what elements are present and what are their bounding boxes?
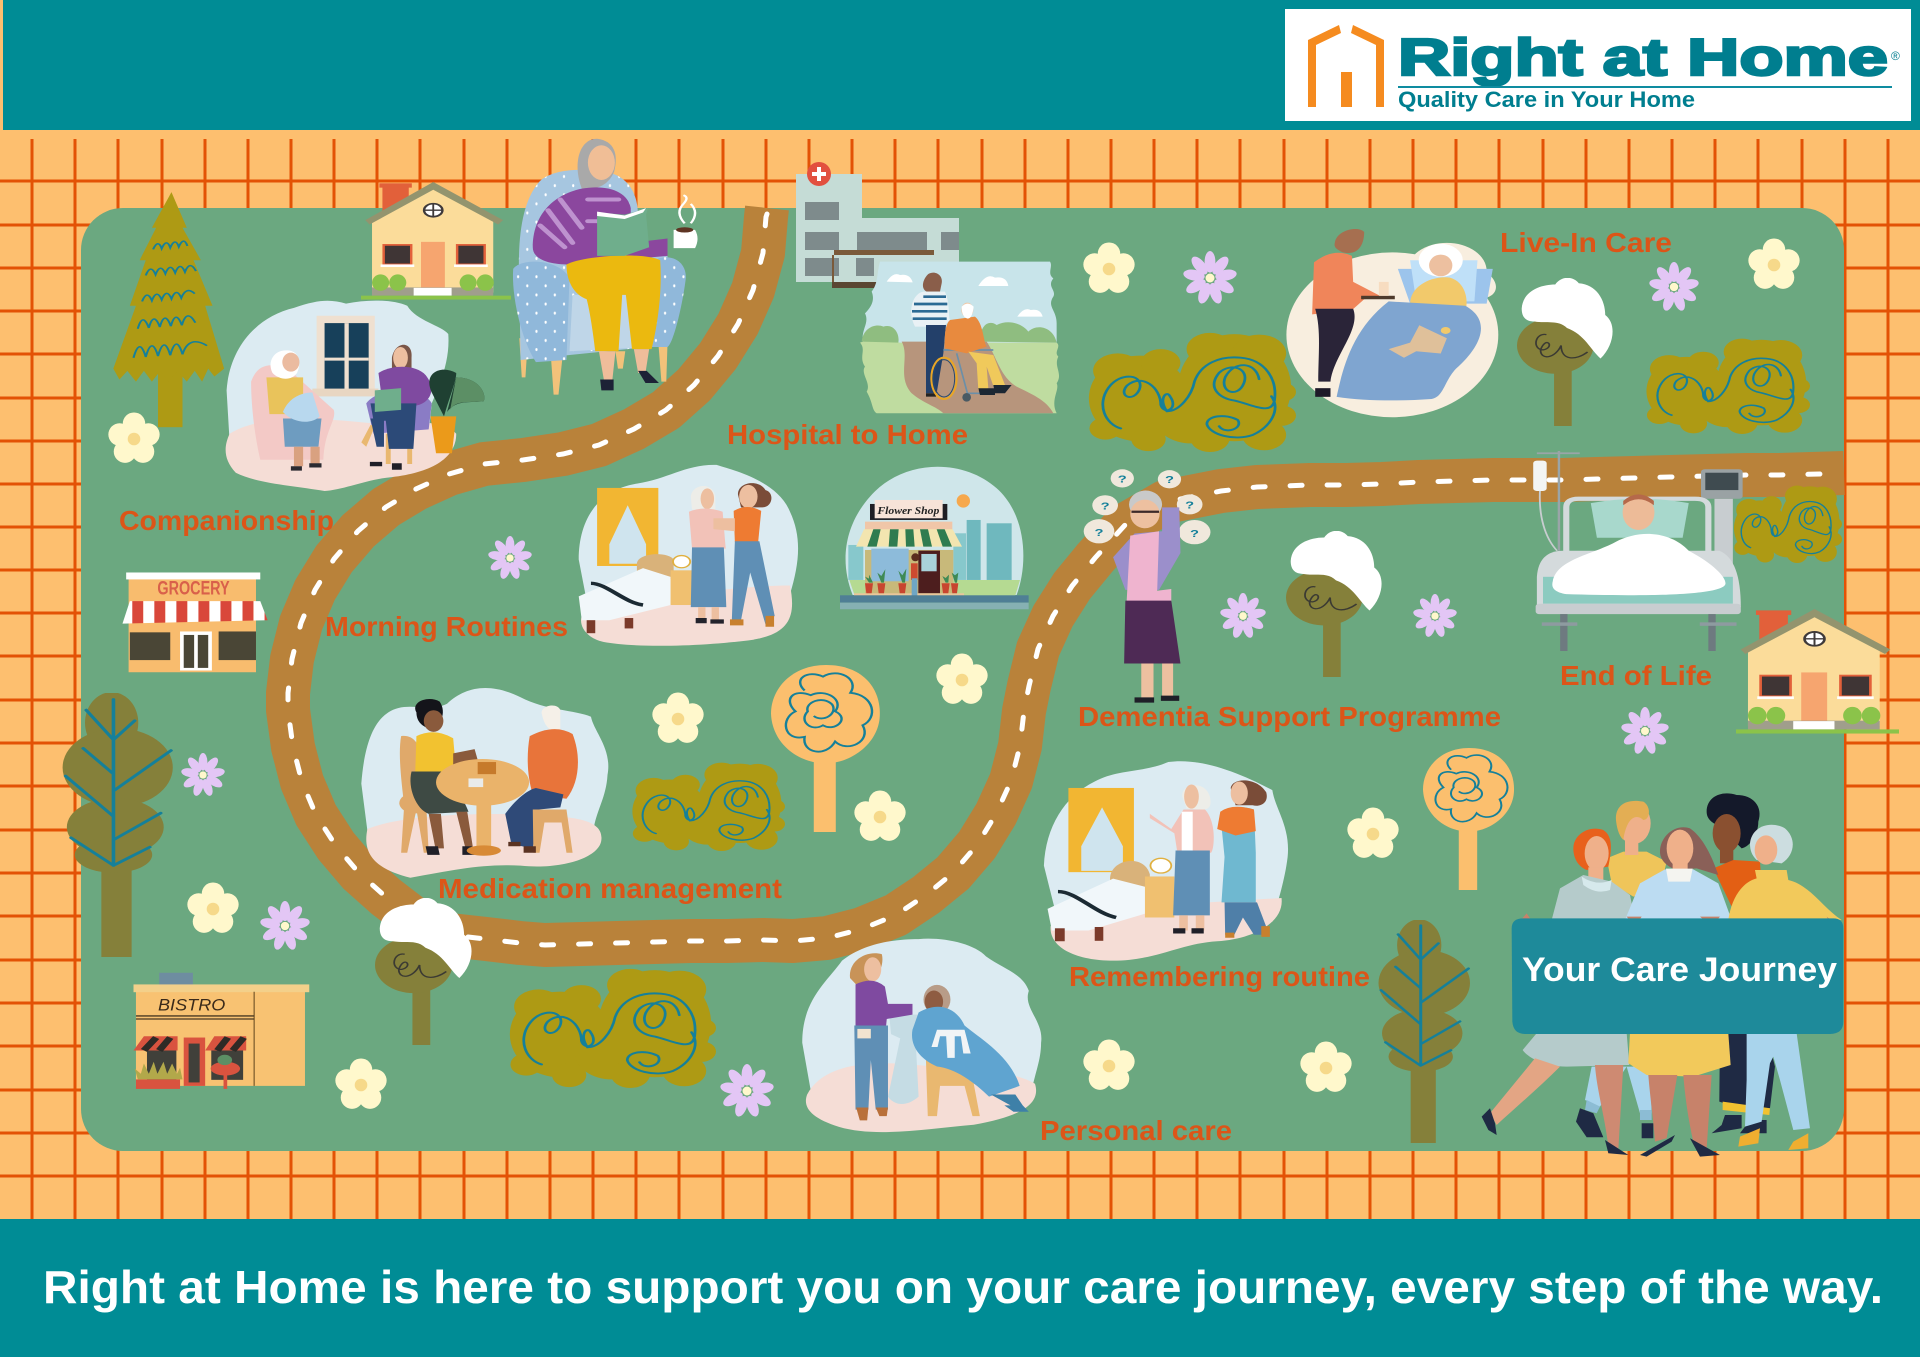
icon: cream flowers [108, 238, 1800, 1109]
seated elder [251, 365, 334, 460]
scene: end of life bed [1533, 451, 1743, 651]
logo wordmark: Right at Home [1398, 29, 1888, 87]
footer band [0, 1219, 1920, 1357]
window [317, 316, 375, 396]
scene: dementia support figure: ? [1118, 472, 1127, 485]
scene: dementia support figure: ? [1190, 527, 1199, 539]
logo rule [1398, 86, 1892, 88]
label: remembering routine: Remembering routine [1069, 961, 1370, 992]
scene: flower shop [840, 467, 1029, 609]
scene: grocery shop [122, 572, 268, 672]
logo house icon [1308, 25, 1384, 107]
label: personal care: Personal care [1040, 1115, 1232, 1146]
trees: orange scribble [771, 665, 1514, 890]
scene: live-in care [1286, 229, 1498, 417]
label: companionship: Companionship [119, 505, 334, 536]
footer message: Right at Home is here to support you on your care journey, every step of the way. [43, 1261, 1883, 1313]
brown hair middle [1660, 827, 1718, 875]
house: start [361, 182, 511, 300]
scene: dementia support figure: ? [1165, 473, 1174, 486]
shop sign text: Flower Shop [876, 506, 939, 517]
carer [923, 273, 942, 292]
scene: remembering routine [1044, 761, 1288, 961]
red hair [1573, 829, 1611, 870]
label: end of life: End of Life [1560, 660, 1712, 691]
back legs [1585, 1067, 1652, 1113]
grey hair elder [1750, 825, 1793, 863]
scene: morning routines [579, 465, 798, 646]
road [288, 208, 1844, 945]
label: medication management: Medication management [438, 873, 782, 904]
plant [429, 370, 484, 416]
scene: dementia support figure: ? [1185, 499, 1194, 511]
grocery sign: GROCERY [157, 577, 230, 599]
scene: dementia support figure: ? [1095, 526, 1104, 539]
scene: hospital to home wheelchair [860, 262, 1059, 413]
scene: personal care [802, 939, 1041, 1132]
bistro sign: BISTRO [158, 996, 226, 1014]
scene: bistro [134, 973, 309, 1089]
label: live-in care: Live-In Care [1500, 227, 1672, 258]
pine tree [113, 192, 224, 427]
icon: purple flowers [181, 251, 1699, 1118]
header band [3, 0, 1920, 130]
scene: armchair reader [513, 139, 698, 395]
heading: your care journey: Your Care Journey [1522, 951, 1837, 989]
logo panel [1285, 9, 1911, 121]
logo tagline: Quality Care in Your Home [1398, 87, 1695, 112]
trees: leaf [63, 692, 1470, 1143]
scene: medication management [361, 688, 608, 878]
afro [1707, 793, 1760, 848]
scene: dementia support figure: ? [1101, 500, 1110, 512]
hospital building [796, 162, 959, 288]
care journey banner shape [1512, 918, 1843, 1034]
scene: dementia support figure [1084, 469, 1210, 703]
house: end [1736, 609, 1899, 734]
wheelchair [931, 358, 957, 399]
seated carer [366, 390, 432, 434]
green map panel [81, 208, 1844, 1151]
label: morning routines: Morning Routines [325, 611, 568, 642]
trees: white topped [375, 278, 1613, 1045]
label: dementia support programme: Dementia Support Programme [1078, 701, 1501, 732]
label: hospital to home: Hospital to Home [727, 419, 968, 450]
registered mark: ® [1891, 49, 1900, 63]
lower bodies [1523, 1033, 1629, 1067]
old man [945, 317, 987, 353]
bushes [510, 333, 1842, 1088]
scene: companionship [226, 301, 484, 491]
blonde [1607, 852, 1667, 897]
hands [1515, 913, 1842, 930]
scene: care team holding banner [1482, 793, 1843, 1157]
